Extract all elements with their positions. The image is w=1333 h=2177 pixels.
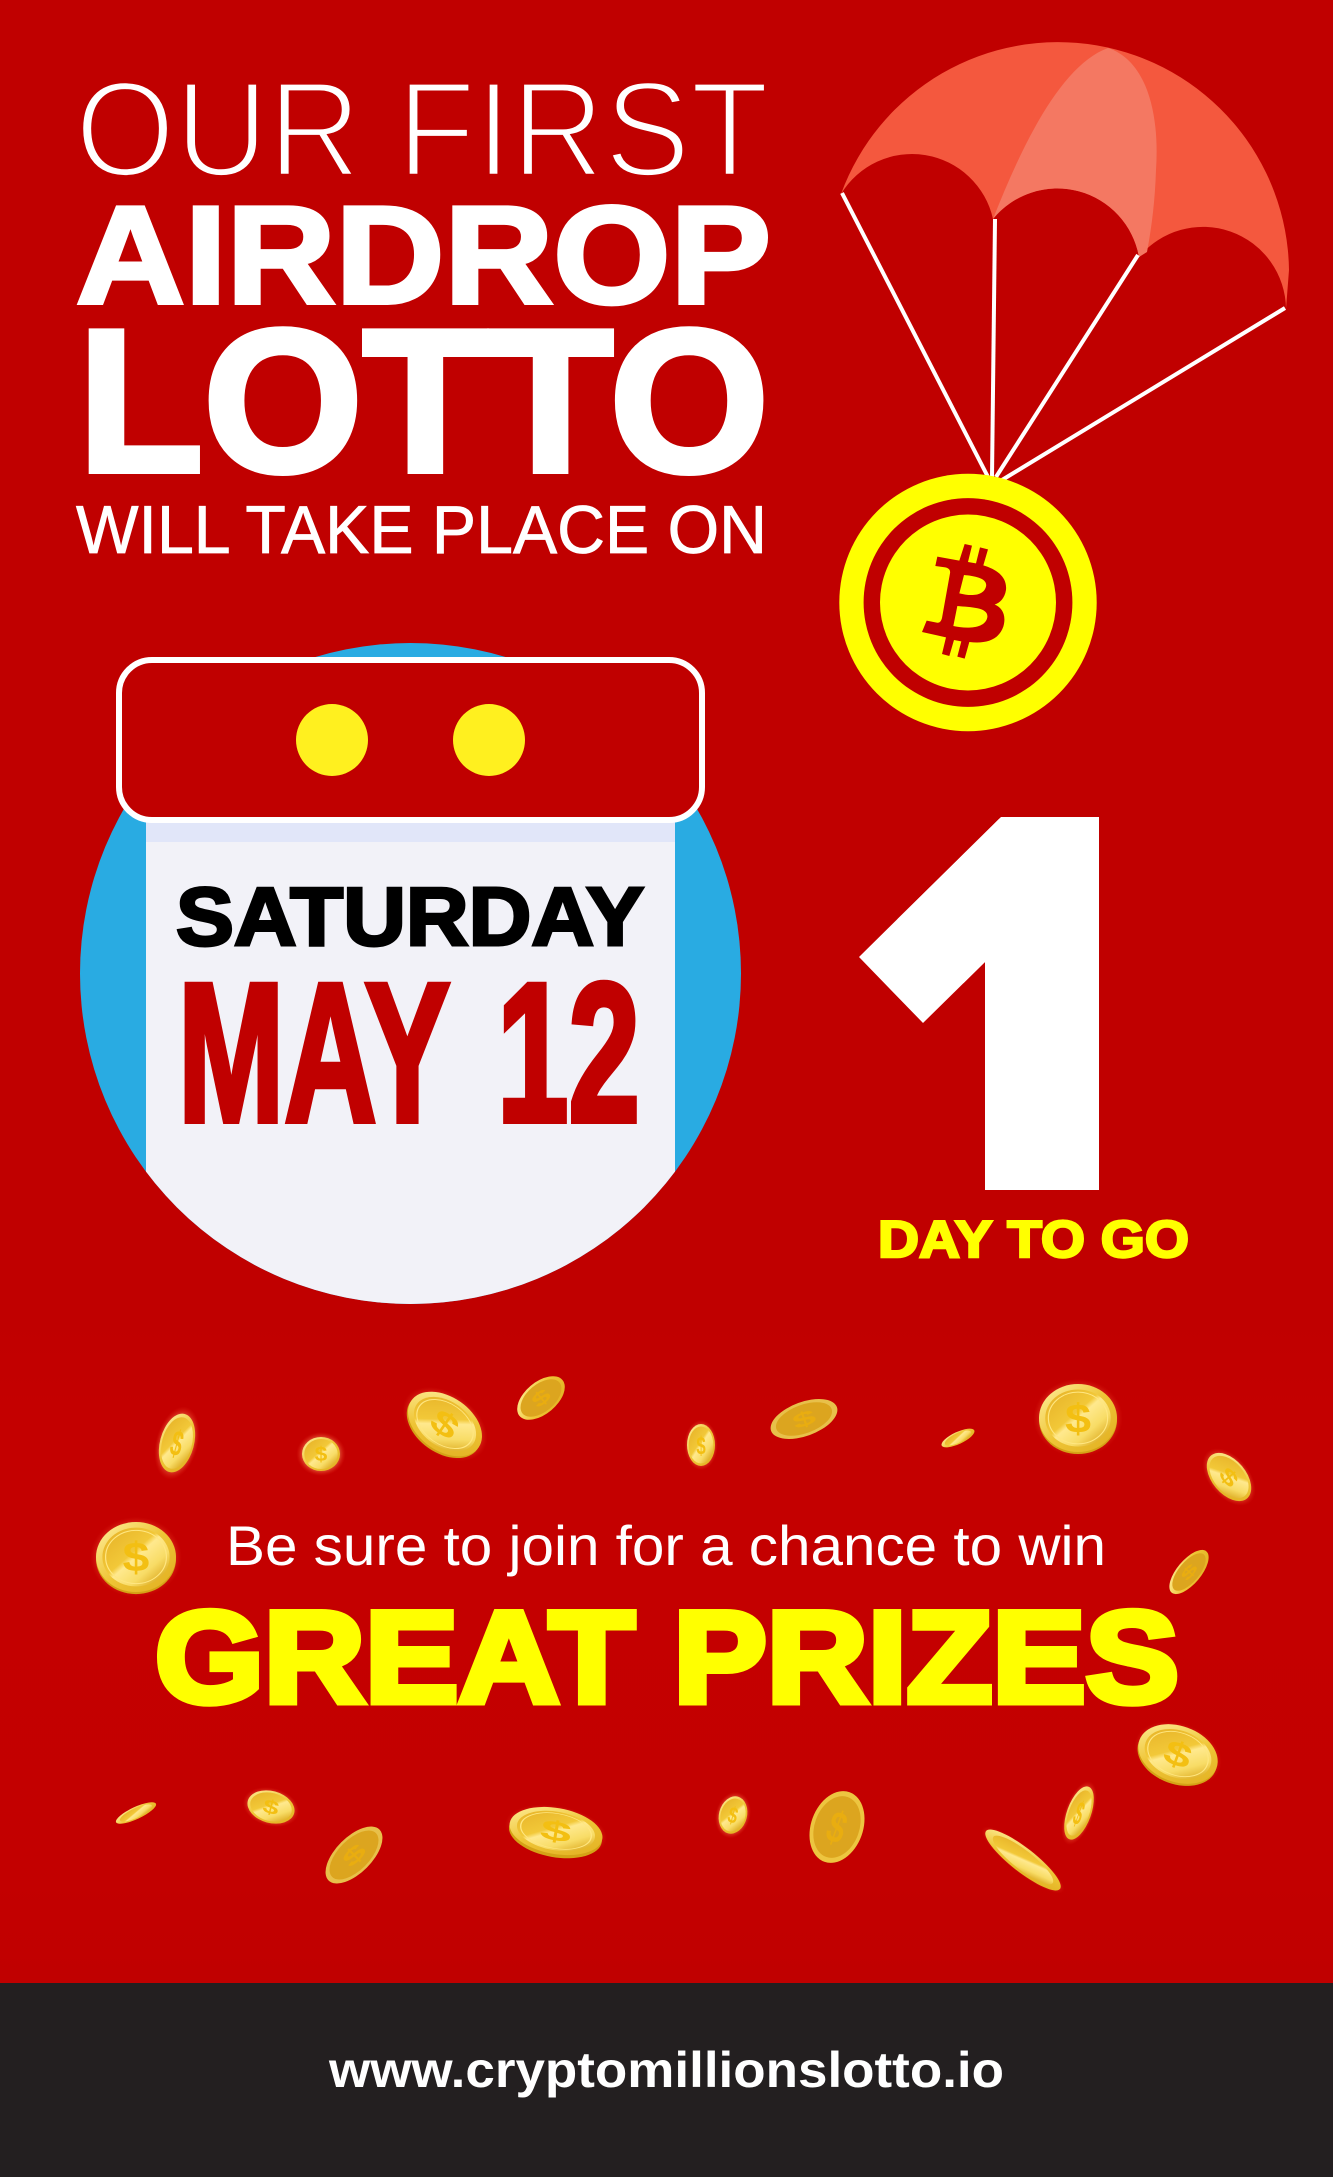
coin (238, 1781, 304, 1833)
footer (0, 1983, 1333, 2177)
coin (939, 1425, 977, 1451)
coin: $ (123, 1534, 149, 1581)
text: great prizes: GREAT PRIZES (155, 1584, 1179, 1730)
coin (389, 1372, 501, 1476)
coin (765, 1391, 843, 1447)
coin: $ (696, 1431, 706, 1460)
coin (684, 1420, 718, 1470)
calendar blue circle (80, 643, 741, 1304)
coin (501, 1797, 611, 1866)
date: may 12: MAY (178, 942, 450, 1163)
coin: $ (260, 1796, 282, 1820)
calendar ring left (296, 704, 368, 776)
coin: $ (423, 1401, 467, 1447)
coin: $ (337, 1838, 371, 1872)
icon: parachute with bitcoin (839, 42, 1289, 731)
coin (90, 1517, 182, 1597)
coin (296, 1432, 346, 1476)
coin: $ (1069, 1796, 1089, 1833)
day to go: DAY TO GO (878, 1211, 1189, 1269)
heading line: will take place on: WILL TAKE PLACE ON (76, 492, 767, 568)
text: be sure to join: Be sure to join for a chance to win (226, 1514, 1106, 1577)
coin: $ (789, 1404, 819, 1434)
coin: $ (527, 1384, 555, 1412)
coin: $ (1214, 1463, 1244, 1492)
coin: $ (820, 1802, 853, 1854)
coin (147, 1401, 207, 1485)
coin (114, 1798, 158, 1828)
calendar ring right (453, 704, 525, 776)
heading line: airdrop: AIRDROP (76, 178, 771, 333)
calendar page (146, 800, 675, 1310)
date: may 12: 12 (497, 942, 640, 1163)
coin: $ (166, 1424, 187, 1465)
coin: $ (1065, 1396, 1091, 1442)
parachute canopy (841, 42, 1289, 309)
heading line: lotto: LOTTO (78, 288, 769, 515)
big number 1: 1 (825, 702, 1155, 1305)
calendar header bar (119, 660, 702, 820)
coin (1162, 1544, 1216, 1600)
coin: $ (538, 1814, 574, 1849)
coin (509, 1368, 573, 1428)
parachute cords (842, 193, 1285, 480)
coin: $ (725, 1803, 740, 1829)
coin (974, 1818, 1072, 1902)
calendar (80, 643, 741, 1310)
heading line: our first: OUR FIRST (75, 53, 769, 205)
coin (316, 1817, 392, 1893)
prize message (155, 1514, 1179, 1730)
date: saturday: SATURDAY (176, 870, 644, 963)
coin: $ (1177, 1560, 1201, 1584)
coin (1192, 1438, 1266, 1516)
countdown (859, 817, 1188, 1259)
coin (1033, 1379, 1123, 1457)
footer bar (0, 1983, 1333, 2177)
coin area background tint (0, 1320, 1333, 1983)
coin (1054, 1777, 1104, 1849)
bitcoin coin (839, 474, 1097, 731)
heading: our first airdrop lotto (75, 53, 771, 568)
coin: $ (315, 1442, 327, 1466)
footer url: www.cryptomillionslotto.io (328, 2042, 1004, 2098)
coin (800, 1783, 874, 1871)
coin: $ (1159, 1732, 1197, 1776)
coin (710, 1788, 756, 1842)
coin (1125, 1710, 1231, 1798)
gold coins scattered (90, 1368, 1266, 1902)
